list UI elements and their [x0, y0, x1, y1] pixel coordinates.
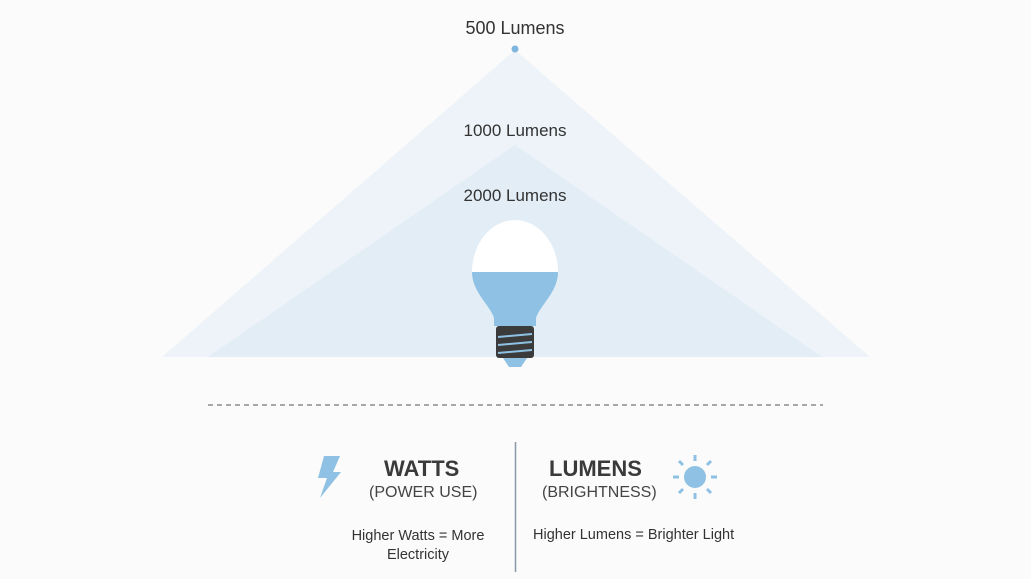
icon: lightning bolt: [318, 456, 341, 498]
text: lumens note: Higher Lumens = Brighter Light: [533, 527, 734, 543]
subheading: power use: (POWER USE): [369, 484, 477, 501]
subheading: brightness: (BRIGHTNESS): [542, 484, 657, 501]
panel: lumens: [533, 455, 734, 543]
text: watts note: Higher Watts = More Electricity: [352, 528, 484, 563]
cone: 500 lumens: [162, 50, 870, 357]
diagram: lumen cones with bulb: [162, 18, 870, 367]
heading: watts: WATTS: [384, 456, 459, 481]
label: 1000 lumens: 1000 Lumens: [463, 121, 567, 140]
icon: light bulb: [472, 220, 558, 367]
label: 2000 lumens: 2000 Lumens: [463, 186, 567, 205]
panel: watts: [318, 456, 484, 563]
icon: sun: [673, 455, 717, 499]
heading: lumens: LUMENS: [549, 456, 642, 481]
label: 500 lumens: 500 Lumens: [465, 18, 565, 38]
dot: apex marker: [512, 46, 518, 52]
cone: 1000 lumens: [208, 145, 822, 357]
